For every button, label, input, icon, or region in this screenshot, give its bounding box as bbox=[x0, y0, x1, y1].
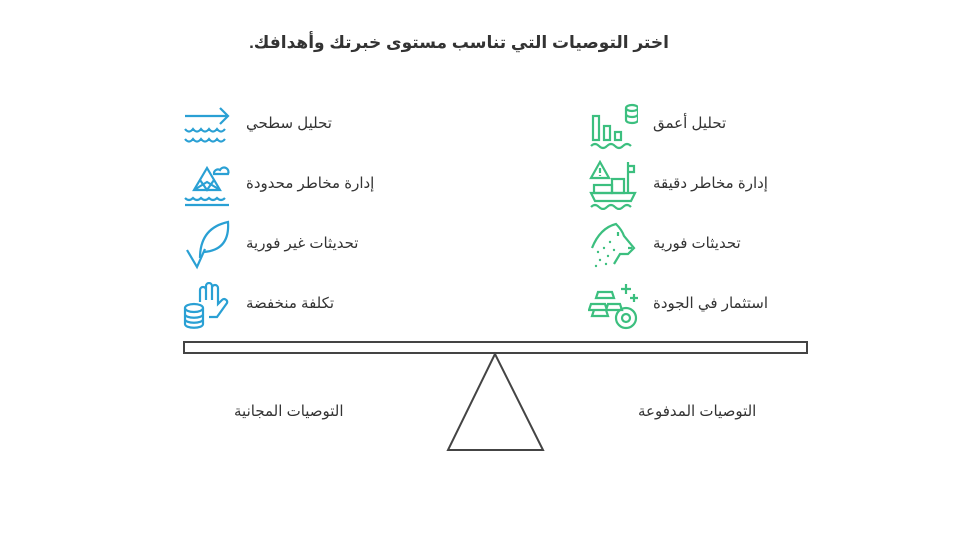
icon: leaf bbox=[186, 220, 230, 270]
label: paid recommendations: التوصيات المدفوعة bbox=[638, 403, 756, 420]
icon: hand with coins bbox=[184, 282, 228, 329]
icon: bar chart with coins bbox=[590, 104, 638, 150]
text: limited risk: إدارة مخاطر محدودة bbox=[246, 175, 374, 192]
text: quality investment: استثمار في الجودة bbox=[653, 295, 768, 312]
icon: surface waves bbox=[184, 107, 230, 143]
text: instant updates: تحديثات فورية bbox=[653, 235, 741, 252]
icon: ship with warning bbox=[589, 160, 637, 210]
icon: gold bars and lifebuoy bbox=[588, 284, 638, 330]
icon: paper boat bbox=[184, 166, 230, 206]
text: non-instant updates: تحديثات غير فورية bbox=[246, 235, 358, 252]
text: deeper analysis: تحليل أعمق bbox=[653, 115, 726, 132]
text: precise risk: إدارة مخاطر دقيقة bbox=[653, 175, 768, 192]
text: low cost: تكلفة منخفضة bbox=[246, 295, 334, 312]
label: free recommendations: التوصيات المجانية bbox=[234, 403, 344, 420]
title: اختر التوصيات التي تناسب مستوى خبرتك وأهدافك. bbox=[249, 33, 669, 52]
icon: cheetah bbox=[591, 222, 636, 268]
text: surface analysis: تحليل سطحي bbox=[246, 115, 332, 132]
